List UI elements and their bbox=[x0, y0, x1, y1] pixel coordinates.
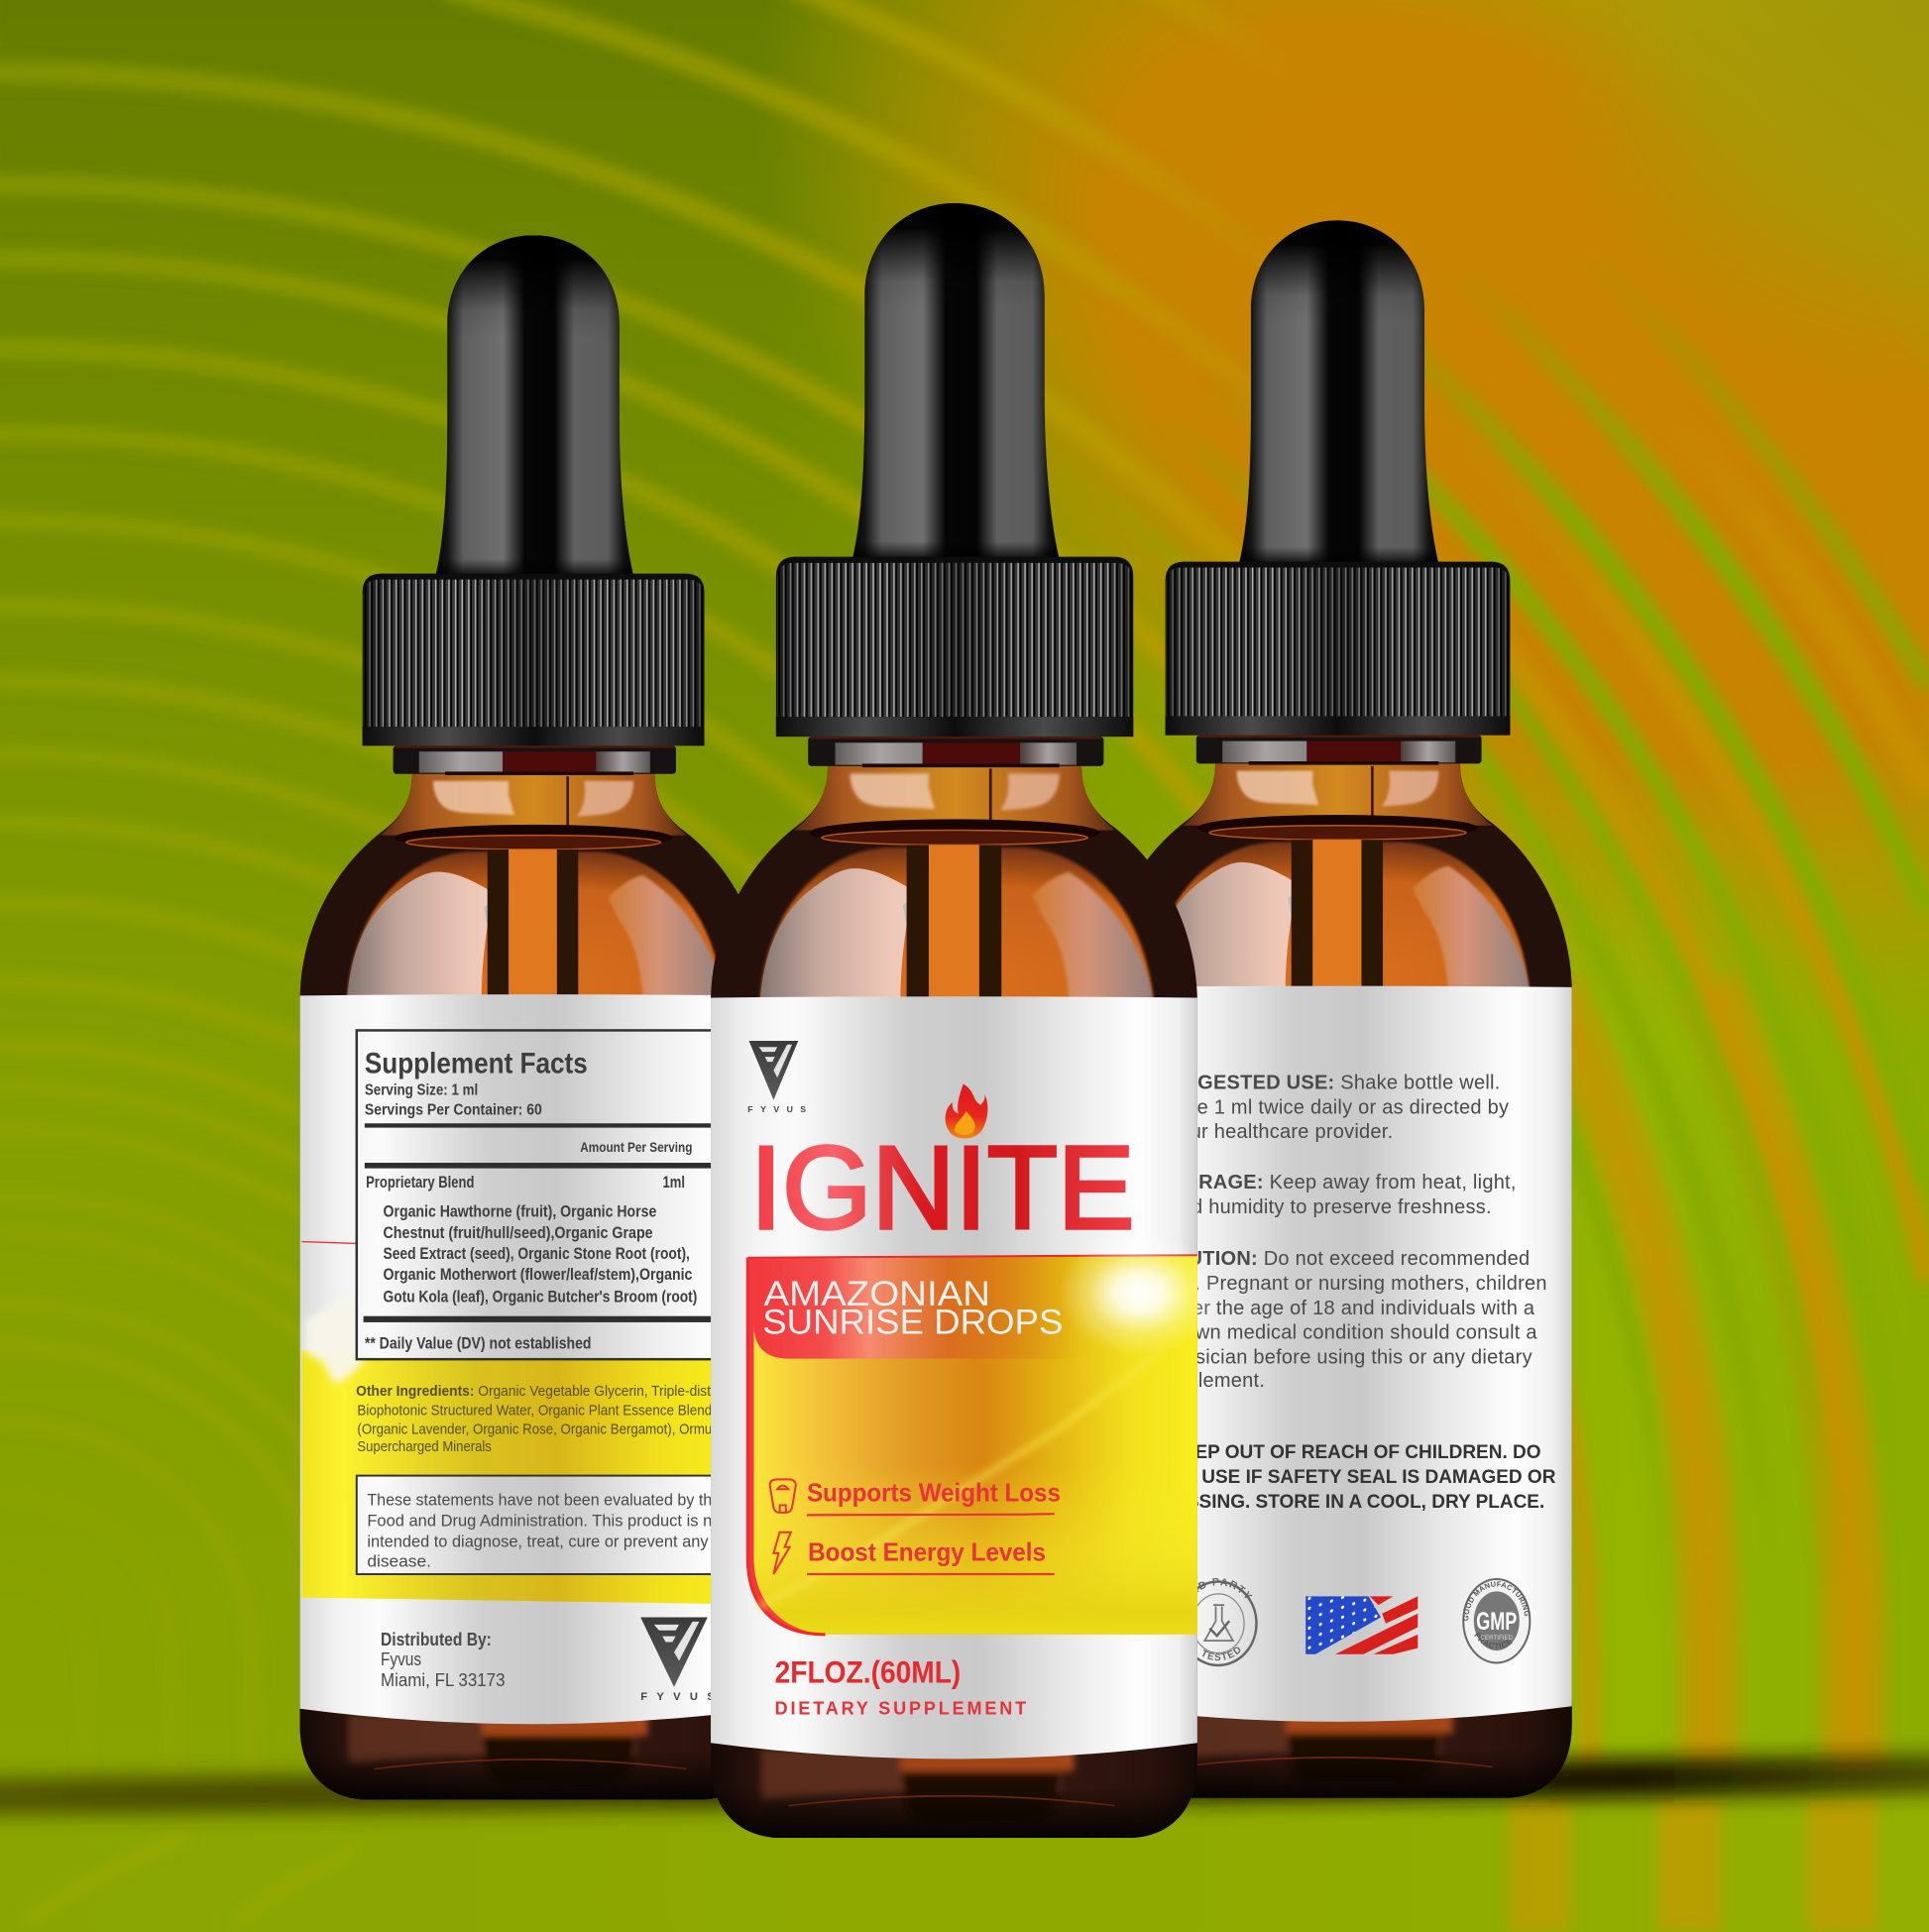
ingredient list: Organic Motherwort (flower/leaf/stem),Organic bbox=[383, 1265, 692, 1284]
icon: GMP certified badge: CERTIFIED bbox=[1480, 1635, 1514, 1642]
benefit: weight loss bbox=[770, 1478, 1061, 1515]
proprietary blend row: 1ml bbox=[663, 1173, 685, 1192]
ingredient list: Organic Hawthorne (fruit), Organic Horse bbox=[383, 1202, 656, 1221]
proprietary blend row: Proprietary Blend bbox=[366, 1173, 474, 1192]
directions text: STORAGE: Keep away from heat, light, bbox=[1158, 1172, 1517, 1193]
icon: GMP certified badge bbox=[1462, 1578, 1531, 1663]
volume: 2FLOZ.(60ML) bbox=[775, 1654, 961, 1689]
benefit: energy bbox=[773, 1533, 1055, 1574]
directions text: known medical condition should consult a bbox=[1163, 1322, 1537, 1344]
red line on left label bbox=[301, 1242, 356, 1243]
benefit: weight loss: Supports Weight Loss bbox=[807, 1478, 1061, 1508]
icon: third party tested badge: THIRD PARTY bbox=[1197, 1578, 1253, 1598]
icon: GMP certified badge: GOOD MANUFACTURING bbox=[1463, 1581, 1530, 1621]
icon: GMP certified badge: GMP bbox=[1476, 1609, 1517, 1636]
other ingredients text: Supercharged Minerals bbox=[357, 1439, 492, 1455]
distributor address: Fyvus bbox=[381, 1649, 421, 1669]
serving information: Serving Size: 1 ml bbox=[365, 1082, 478, 1099]
icon: Fyvus logo, left bottle: FYVUS bbox=[640, 1691, 724, 1703]
icon: third party tested badge bbox=[1197, 1578, 1258, 1667]
heading: supplement facts: Supplement Facts bbox=[365, 1047, 588, 1080]
bottle: left, supplement facts bbox=[300, 235, 765, 1799]
directions text: your healthcare provider. bbox=[1169, 1121, 1393, 1143]
icon: Fyvus logo, front: FYVUS bbox=[747, 1104, 814, 1114]
daily value note: ** Daily Value (DV) not established bbox=[365, 1334, 591, 1353]
icon: USA flag bbox=[1305, 1596, 1418, 1654]
directions text: supplement. bbox=[1154, 1370, 1265, 1392]
directions text: dose. Pregnant or nursing mothers, children bbox=[1151, 1273, 1547, 1295]
other ingredients text: (Organic Lavender, Organic Rose, Organic Bergamot), Ormu bbox=[357, 1421, 712, 1437]
floor reflection of ripples bbox=[0, 1780, 1929, 1932]
panel: left label yellow band bbox=[301, 1294, 715, 1604]
wide lower right bands bbox=[1549, 985, 1710, 1773]
ingredient list: Seed Extract (seed), Organic Stone Root (root), bbox=[383, 1244, 690, 1263]
icon: flame bbox=[946, 1083, 987, 1138]
serving information: Servings Per Container: 60 bbox=[365, 1102, 542, 1119]
icon: third party tested badge: TESTED bbox=[1202, 1648, 1241, 1661]
green bands through orange area bbox=[1138, 290, 1929, 1527]
bottle: centre, front label bbox=[711, 203, 1220, 1838]
product name: SUNRISE DROPS bbox=[762, 1305, 1063, 1342]
other ingredients text: Other Ingredients: Organic Vegetable Glycerin, Triple-dist bbox=[356, 1384, 712, 1400]
serving information bbox=[365, 1082, 542, 1119]
ingredient list bbox=[383, 1202, 697, 1306]
other ingredients text bbox=[356, 1384, 712, 1455]
product name bbox=[762, 1276, 1063, 1342]
proprietary blend row bbox=[366, 1173, 685, 1192]
panel: FDA disclaimer: disease. bbox=[367, 1552, 431, 1571]
distributor address bbox=[381, 1630, 506, 1690]
icon: Fyvus logo, front bbox=[747, 1041, 814, 1114]
distributor address: Distributed By: bbox=[381, 1630, 492, 1649]
directions text: CAUTION: Do not exceed recommended bbox=[1159, 1248, 1530, 1270]
bottle: right, directions bbox=[1147, 220, 1572, 1798]
title: IGNITE with flame: IGNITE bbox=[750, 1122, 1134, 1254]
panel: sunrise band on front label bbox=[747, 1232, 1220, 1635]
panel: supplement facts table bbox=[357, 1030, 727, 1359]
directions text bbox=[1151, 1072, 1556, 1513]
column heading: Amount Per Serving bbox=[580, 1140, 692, 1156]
product name: AMAZONIAN bbox=[763, 1276, 990, 1313]
icon: lightning bolt bbox=[773, 1533, 791, 1574]
ingredient list: Chestnut (fruit/hull/seed),Organic Grape bbox=[383, 1223, 653, 1242]
directions text: NOT USE IF SAFETY SEAL IS DAMAGED OR bbox=[1157, 1467, 1556, 1488]
panel: FDA disclaimer: Food and Drug Administration. This product is n bbox=[367, 1512, 712, 1531]
directions text: Take 1 ml twice daily or as directed by bbox=[1166, 1096, 1509, 1118]
panel: FDA disclaimer: intended to diagnose, treat, cure or prevent any bbox=[367, 1533, 709, 1551]
directions text: under the age of 18 and individuals with a bbox=[1159, 1298, 1535, 1319]
floor shadow bbox=[0, 1754, 1929, 1816]
benefit: energy: Boost Energy Levels bbox=[808, 1536, 1046, 1566]
icon: scale bbox=[770, 1479, 796, 1513]
ingredient list: Gotu Kola (leaf), Organic Butcher's Broom (root) bbox=[383, 1287, 697, 1306]
other ingredients text: Biophotonic Structured Water, Organic Plant Essence Blend bbox=[357, 1404, 712, 1420]
directions text: and humidity to preserve freshness. bbox=[1169, 1196, 1492, 1218]
directions text: physician before using this or any dietary bbox=[1163, 1347, 1532, 1369]
directions text: MISSING. STORE IN A COOL, DRY PLACE. bbox=[1166, 1492, 1544, 1513]
directions text: KEEP OUT OF REACH OF CHILDREN. DO bbox=[1169, 1442, 1541, 1463]
icon: GMP certified badge: PRACTICE bbox=[1474, 1632, 1513, 1649]
icon: Fyvus logo, left bottle bbox=[640, 1618, 724, 1703]
panel: FDA disclaimer: These statements have not been evaluated by th bbox=[367, 1490, 712, 1509]
distributor address: Miami, FL 33173 bbox=[381, 1670, 506, 1690]
directions text: SUGGESTED USE: Shake bottle well. bbox=[1154, 1072, 1501, 1093]
product type: DIETARY SUPPLEMENT bbox=[775, 1699, 1026, 1719]
panel: FDA disclaimer bbox=[357, 1476, 727, 1574]
